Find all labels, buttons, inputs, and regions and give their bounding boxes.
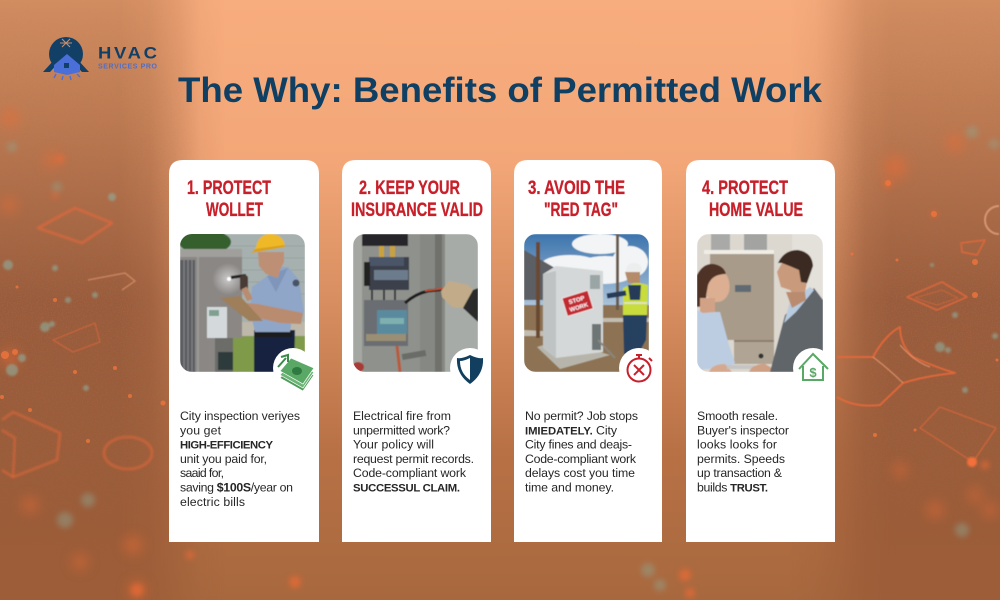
panel: protect wallet xyxy=(169,160,319,542)
panel: keep insurance valid xyxy=(342,160,491,542)
photo: stop work order: WORK xyxy=(569,302,590,314)
panel: avoid the red tag xyxy=(514,160,662,542)
heading: HOME VALUE xyxy=(709,200,803,221)
badge: house with dollar icon: $ xyxy=(809,365,817,380)
body text: Code-compliant work xyxy=(353,466,467,480)
logo wordmark xyxy=(98,43,158,70)
logo wordmark: SERVICES PRO xyxy=(98,64,158,70)
body text: No permit? Job stops xyxy=(525,409,638,423)
body text: Smooth resale. xyxy=(697,409,778,423)
photo: electrical panel xyxy=(352,234,478,372)
body text: delays cost you time xyxy=(525,466,635,480)
body text: saving $100S/year on xyxy=(180,480,293,494)
body text: City fines and deajs- xyxy=(525,438,632,452)
body text: permits. Speeds xyxy=(697,452,785,466)
photo: inspector at AC unit xyxy=(179,230,305,372)
photo: stop work order xyxy=(524,234,649,372)
body text: looks looks for xyxy=(697,438,777,452)
body text xyxy=(697,409,789,494)
heading: 3. AVOID THE xyxy=(528,178,625,199)
body text: Electrical fire from xyxy=(353,409,451,423)
body text: IMIEDATELY. City xyxy=(525,423,618,437)
body text: request permit records. xyxy=(353,452,474,466)
heading: "RED TAG" xyxy=(544,200,618,221)
body text: time and money. xyxy=(525,480,614,494)
body text: you get xyxy=(180,423,222,437)
logo wordmark: HVAC xyxy=(98,43,157,62)
body text: saaid for, xyxy=(180,466,224,480)
body text: Your policy will xyxy=(353,438,434,452)
heading xyxy=(351,178,483,221)
logo mark xyxy=(43,37,89,80)
body text xyxy=(525,409,638,494)
photo: stop work order: STOP xyxy=(568,296,586,306)
badge: house with dollar icon xyxy=(793,348,833,388)
heading xyxy=(187,178,271,221)
body text: Code-compliant work xyxy=(525,452,637,466)
body text xyxy=(180,409,300,509)
heading: WOLLET xyxy=(206,200,263,221)
body text: SUCCESSUL CLAIM. xyxy=(353,482,460,494)
heading xyxy=(702,178,803,221)
body text: City inspection veriyes xyxy=(180,409,300,423)
photo: couple by furnace xyxy=(697,234,823,372)
body text: Buyer's inspector xyxy=(697,423,789,437)
heading: 2. KEEP YOUR xyxy=(359,178,460,199)
body text: electric bills xyxy=(180,495,245,509)
badge: stopwatch icon xyxy=(619,348,659,388)
logo xyxy=(43,37,158,80)
title: The Why: Benefits of Permitted Work xyxy=(178,71,823,110)
body text: unit you paid for, xyxy=(180,452,267,466)
panel: protect home value xyxy=(686,160,835,542)
heading: 1. PROTECT xyxy=(187,178,271,199)
badge: cash icon xyxy=(273,348,314,391)
body text xyxy=(353,409,474,494)
body text: builds TRUST. xyxy=(697,480,768,494)
body text: HIGH-EFFICIENCY xyxy=(180,440,273,452)
heading xyxy=(528,178,625,221)
body text: unpermitted work? xyxy=(353,423,450,437)
heading: 4. PROTECT xyxy=(702,178,788,199)
badge: shield icon xyxy=(450,348,490,388)
heading: INSURANCE VALID xyxy=(351,200,483,221)
body text: up transaction & xyxy=(697,466,783,480)
